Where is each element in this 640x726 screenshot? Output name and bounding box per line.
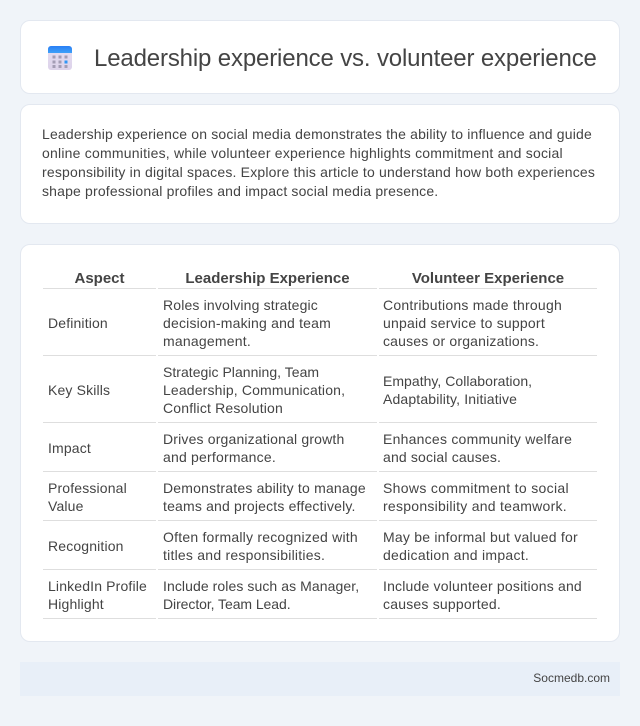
row: definition: decision-making and team bbox=[163, 315, 331, 331]
row: impact: and performance. bbox=[163, 449, 276, 465]
row: key skills: Key Skills bbox=[48, 382, 110, 398]
intro text: online communities, while volunteer experience highlights commitment and social bbox=[42, 145, 563, 161]
row: key skills: Strategic Planning, Team bbox=[163, 364, 319, 380]
row: professional value: Professional bbox=[48, 480, 127, 496]
row: definition bbox=[48, 297, 562, 349]
row: linkedin profile highlight: Include volunteer positions and bbox=[383, 578, 582, 594]
row: key skills bbox=[48, 364, 532, 416]
intro text: responsibility in digital spaces. Explore this article to understand how both experiences bbox=[42, 164, 595, 180]
footer bar bbox=[20, 662, 620, 696]
icon: calendar bbox=[48, 46, 72, 70]
row: professional value: Value bbox=[48, 498, 84, 514]
row: linkedin profile highlight: Director, Team Lead. bbox=[163, 596, 291, 612]
row: linkedin profile highlight: LinkedIn Profile bbox=[48, 578, 147, 594]
row: impact: and social causes. bbox=[383, 449, 501, 465]
footer credit: Socmedb.com bbox=[533, 671, 610, 685]
row: recognition: Often formally recognized with bbox=[163, 529, 358, 545]
table header: Leadership Experience bbox=[185, 270, 350, 287]
row: recognition: May be informal but valued for bbox=[383, 529, 578, 545]
row: impact: Impact bbox=[48, 440, 91, 456]
row: definition: Definition bbox=[48, 315, 108, 331]
intro text bbox=[42, 126, 595, 199]
row: impact: Enhances community welfare bbox=[383, 431, 572, 447]
row: key skills: Conflict Resolution bbox=[163, 400, 283, 416]
row: impact bbox=[48, 431, 572, 465]
table header: Aspect bbox=[74, 270, 125, 287]
row: linkedin profile highlight bbox=[48, 578, 582, 612]
row: professional value: teams and projects effectively. bbox=[163, 498, 356, 514]
table header bbox=[74, 270, 564, 287]
row: linkedin profile highlight: Include roles such as Manager, bbox=[163, 578, 359, 594]
row: recognition: Recognition bbox=[48, 538, 124, 554]
row: recognition: dedication and impact. bbox=[383, 547, 529, 563]
row: recognition bbox=[48, 529, 578, 563]
intro text: shape professional profiles and impact social media presence. bbox=[42, 183, 438, 199]
row: professional value: responsibility and teamwork. bbox=[383, 498, 567, 514]
row: linkedin profile highlight: causes supported. bbox=[383, 596, 501, 612]
row: key skills: Leadership, Communication, bbox=[163, 382, 345, 398]
panel: introduction bbox=[20, 104, 620, 224]
row: definition: causes or organizations. bbox=[383, 333, 539, 349]
row: recognition: titles and responsibilities. bbox=[163, 547, 325, 563]
panel: comparison table bbox=[20, 244, 620, 642]
row: definition: Roles involving strategic bbox=[163, 297, 318, 313]
row: linkedin profile highlight: Highlight bbox=[48, 596, 104, 612]
row: professional value: Shows commitment to social bbox=[383, 480, 569, 496]
row: impact: Drives organizational growth bbox=[163, 431, 344, 447]
table header: Volunteer Experience bbox=[412, 270, 564, 287]
row: professional value: Demonstrates ability to manage bbox=[163, 480, 366, 496]
title: Leadership experience vs. volunteer experience bbox=[94, 45, 597, 72]
row: key skills: Adaptability, Initiative bbox=[383, 391, 517, 407]
row: professional value bbox=[48, 480, 569, 514]
row: key skills: Empathy, Collaboration, bbox=[383, 373, 532, 389]
row: definition: management. bbox=[163, 333, 251, 349]
row: definition: Contributions made through bbox=[383, 297, 562, 313]
intro text: Leadership experience on social media demonstrates the ability to influence and guide bbox=[42, 126, 592, 142]
row: definition: unpaid service to support bbox=[383, 315, 545, 331]
panel: title card bbox=[20, 20, 620, 94]
